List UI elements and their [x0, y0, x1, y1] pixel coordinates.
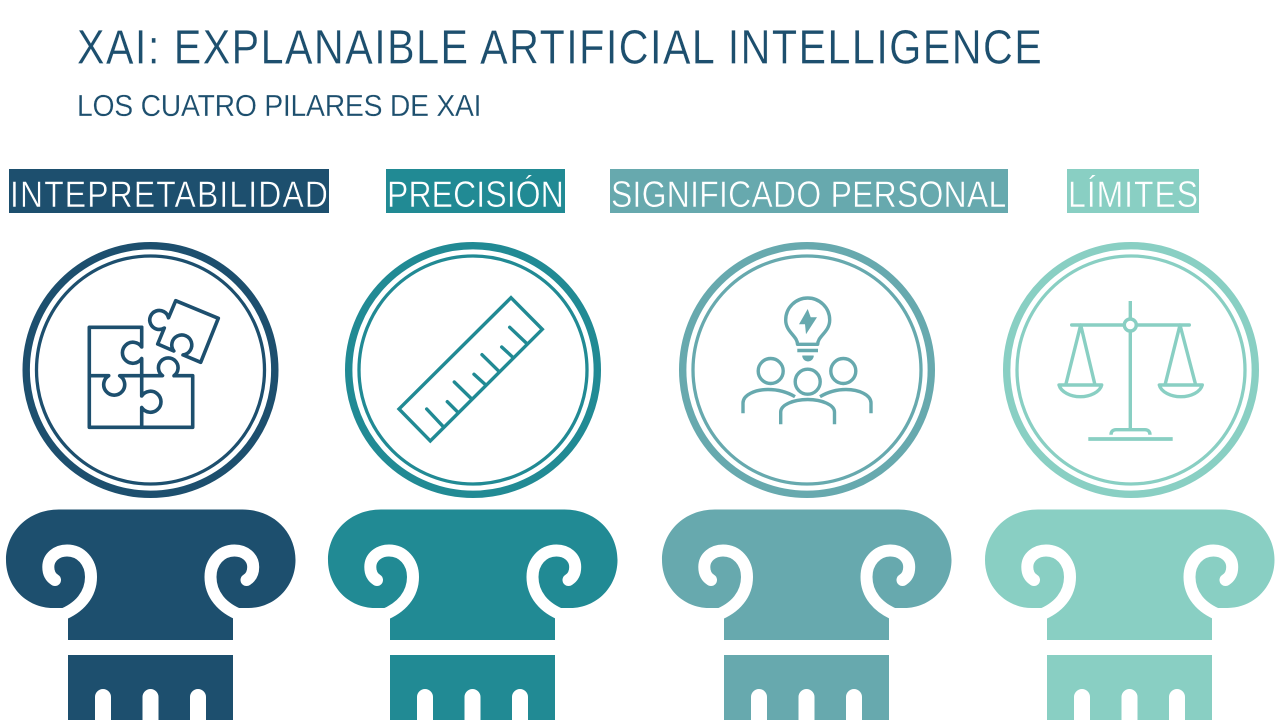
label: Límites: LÍMITES: [1068, 174, 1198, 216]
title: XAI: EXPLANAIBLE ARTIFICIAL INTELLIGENCE: [77, 19, 1042, 74]
icon: balance scale: [1059, 301, 1202, 439]
icon: puzzle: [89, 301, 218, 427]
medallion ring: [349, 246, 597, 494]
label: Intepretabilidad: INTEPRETABILIDAD: [10, 174, 328, 216]
column capital: [985, 510, 1274, 720]
label: Precisión: PRECISIÓN: [387, 174, 564, 216]
panel: pillar Límites: [985, 169, 1274, 720]
medallion ring: [1007, 246, 1255, 494]
panel: pillar Significado personal: [610, 169, 1008, 720]
label: Significado personal: SIGNIFICADO PERSONAL: [611, 174, 1006, 216]
medallion ring: [26, 246, 275, 494]
column capital: [328, 510, 618, 720]
panel: pillar Interpretabilidad: [6, 169, 329, 720]
column capital: [6, 510, 296, 720]
subtitle: LOS CUATRO PILARES DE XAI: [77, 89, 482, 123]
medallion ring: [683, 246, 931, 494]
icon: ruler: [399, 298, 542, 441]
icon: lightbulb and people: [743, 298, 871, 424]
column capital: [662, 510, 952, 720]
panel: pillar Precisión: [328, 169, 618, 720]
